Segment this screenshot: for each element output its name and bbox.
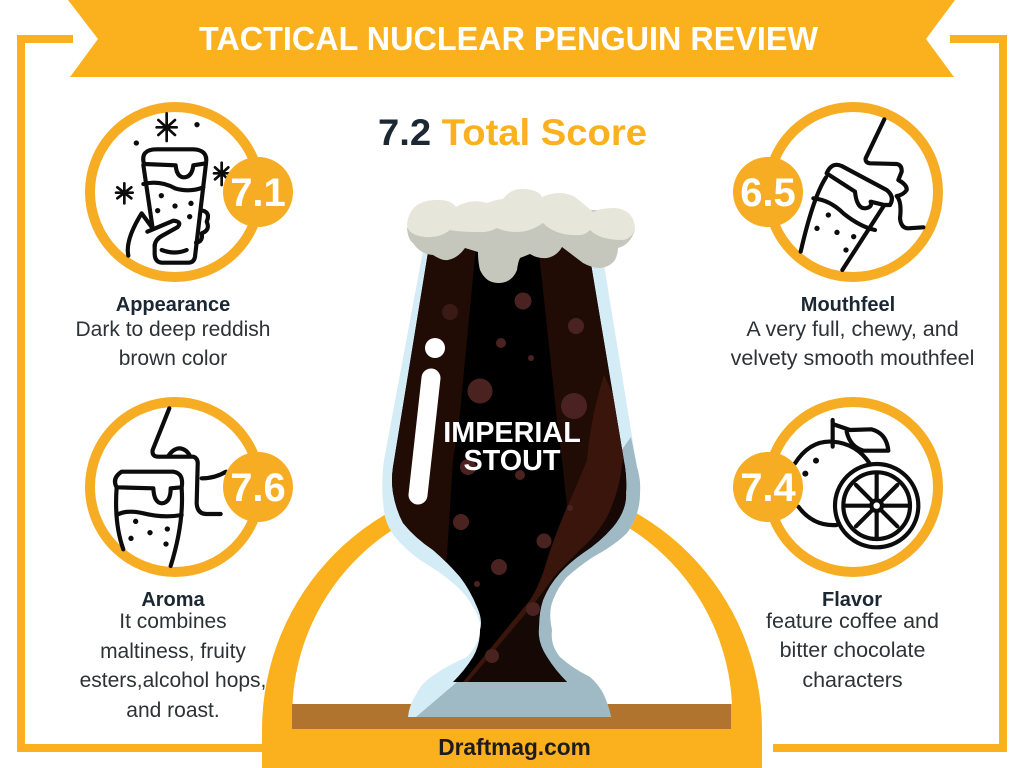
source footer: Draftmag.com	[438, 734, 591, 760]
description: and roast.	[126, 699, 220, 722]
beer glass	[380, 189, 640, 717]
bubbles	[442, 292, 587, 663]
beer left tone	[392, 248, 476, 562]
score badge: 7.1	[230, 171, 286, 215]
beer lower tone	[468, 463, 626, 682]
total score heading: 7.2 Total Score	[378, 112, 647, 153]
icon: nose smelling glass	[115, 408, 226, 566]
icon: hand holding beer glass	[116, 113, 229, 263]
foam shadow	[407, 210, 635, 283]
glass label	[443, 417, 581, 477]
glass shading	[416, 437, 640, 717]
beer swoosh	[463, 375, 630, 682]
description: A very full, chewy, and	[746, 317, 959, 341]
score badge: 7.6	[230, 466, 286, 510]
description: It combines	[119, 610, 227, 633]
description: Dark to deep reddish	[76, 318, 270, 341]
heading: Appearance	[116, 294, 230, 316]
heading: Aroma	[141, 589, 206, 611]
score badge	[733, 452, 803, 522]
panel: flavor	[733, 402, 939, 692]
heading: Mouthfeel	[801, 294, 895, 316]
panel: mouthfeel	[731, 107, 974, 370]
highlight dot	[425, 338, 445, 358]
panel: aroma	[80, 402, 293, 722]
score badge	[733, 157, 803, 227]
glass label: STOUT	[463, 445, 561, 477]
score badge	[223, 452, 293, 522]
description: velvety smooth mouthfeel	[731, 346, 974, 370]
description: maltiness, fruity	[100, 640, 246, 663]
highlight bar	[418, 378, 431, 495]
beer	[392, 247, 626, 682]
description: esters,alcohol hops,	[80, 669, 266, 692]
foam	[407, 189, 635, 283]
score badge	[223, 157, 293, 227]
score badge: 7.4	[740, 466, 797, 510]
title: TACTICAL NUCLEAR PENGUIN REVIEW	[199, 20, 819, 57]
icon: drinking from glass	[801, 119, 923, 270]
description: brown color	[119, 347, 227, 370]
description: characters	[802, 668, 903, 692]
beer right tone	[540, 247, 626, 506]
panel: appearance	[76, 107, 293, 370]
description: feature coffee and	[766, 609, 939, 633]
score badge: 6.5	[740, 171, 796, 215]
glass outline	[382, 240, 640, 717]
description: bitter chocolate	[780, 638, 925, 662]
icon: orange and slice	[795, 420, 918, 547]
arch behind glass	[262, 480, 762, 768]
title banner	[68, 0, 955, 77]
heading: Flavor	[822, 589, 882, 611]
foam top	[407, 189, 635, 240]
glass label: IMPERIAL	[443, 417, 581, 449]
